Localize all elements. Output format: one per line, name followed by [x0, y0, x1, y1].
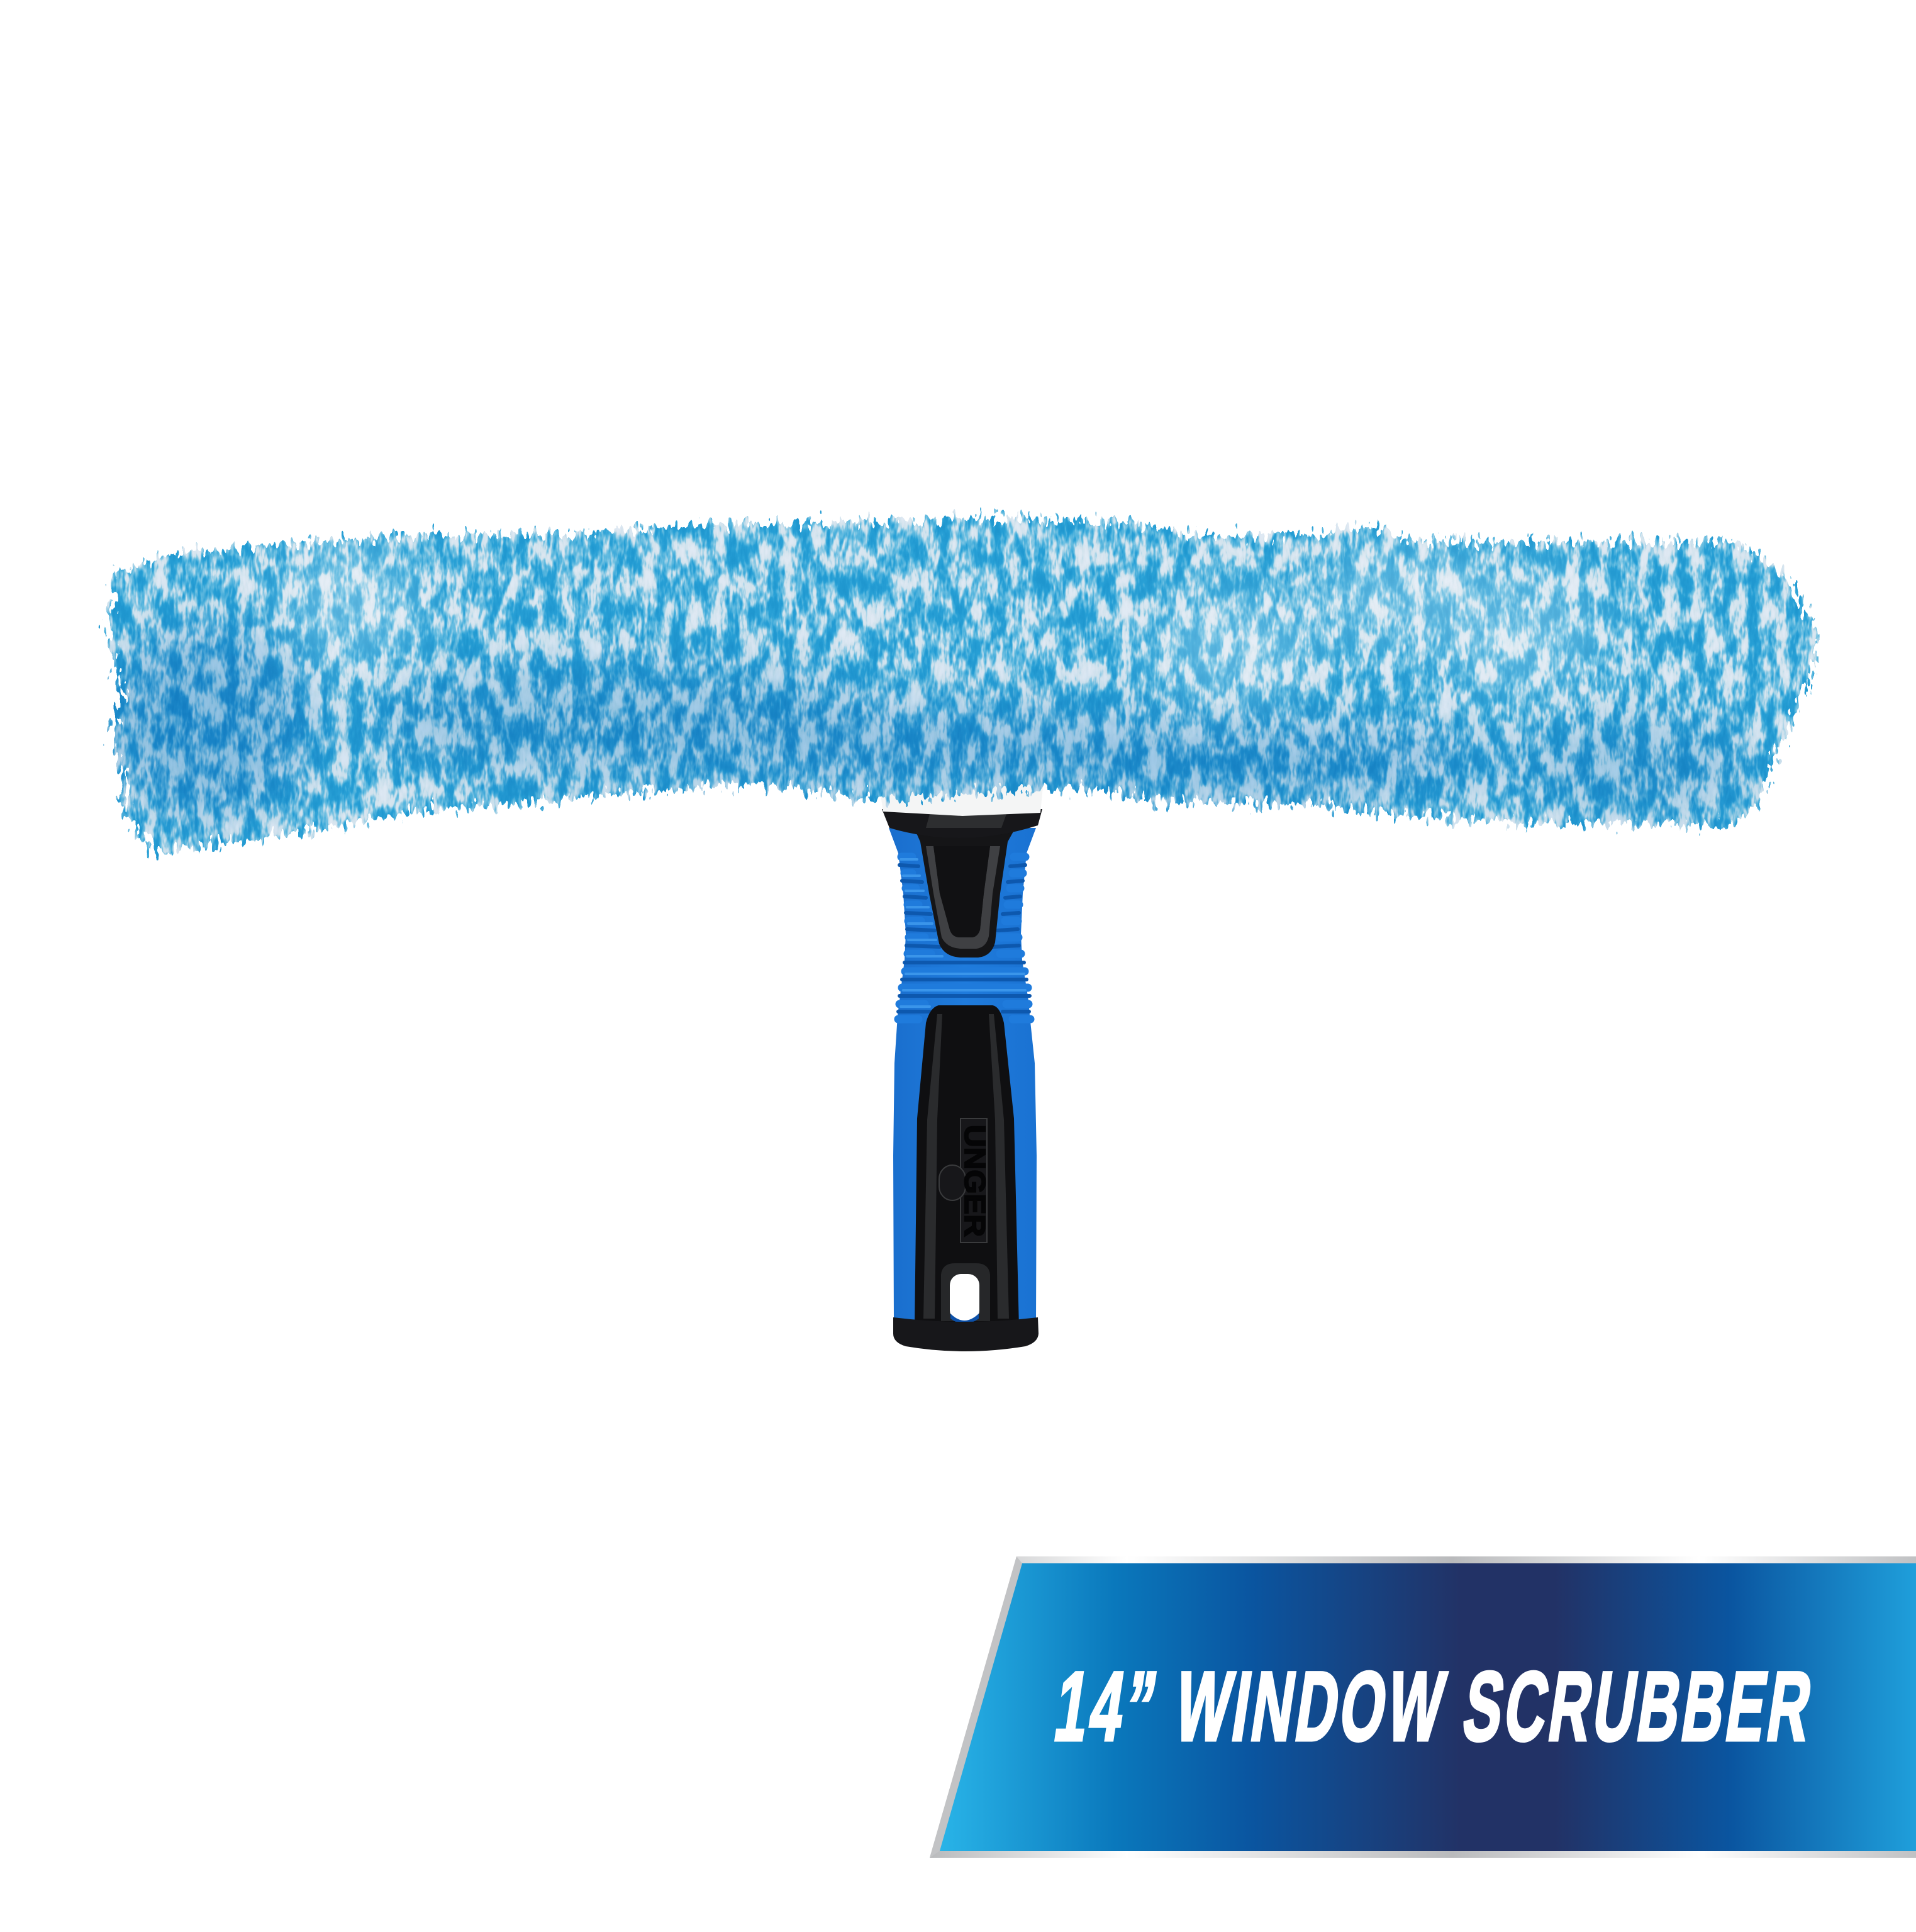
light patches [283, 547, 1604, 698]
product name banner [930, 1556, 1916, 1858]
grip edge ridges [898, 857, 1030, 1019]
window scrubber product [101, 517, 1820, 1351]
fibre mottling [101, 517, 1820, 852]
lower black insert [915, 1005, 1019, 1327]
banner silver border [930, 1556, 1916, 1858]
handle foot [893, 1317, 1039, 1351]
grip ridge grooves [898, 865, 1030, 1012]
upper black insert [915, 830, 1014, 958]
handle blue grip body [889, 828, 1037, 1322]
embossed UNGER logo [939, 1119, 991, 1242]
embossed UNGER logo: UNGER [959, 1125, 991, 1237]
banner title: 14” WINDOW SCRUBBER [1049, 1652, 1819, 1762]
hanging hole [941, 1263, 990, 1324]
handle collar [882, 809, 1042, 838]
banner blue panel [940, 1563, 1916, 1851]
banner left edge [930, 1556, 1022, 1858]
white sleeve tab [877, 774, 1044, 816]
scrubber handle [882, 809, 1042, 1351]
microfibre sleeve [101, 517, 1820, 852]
